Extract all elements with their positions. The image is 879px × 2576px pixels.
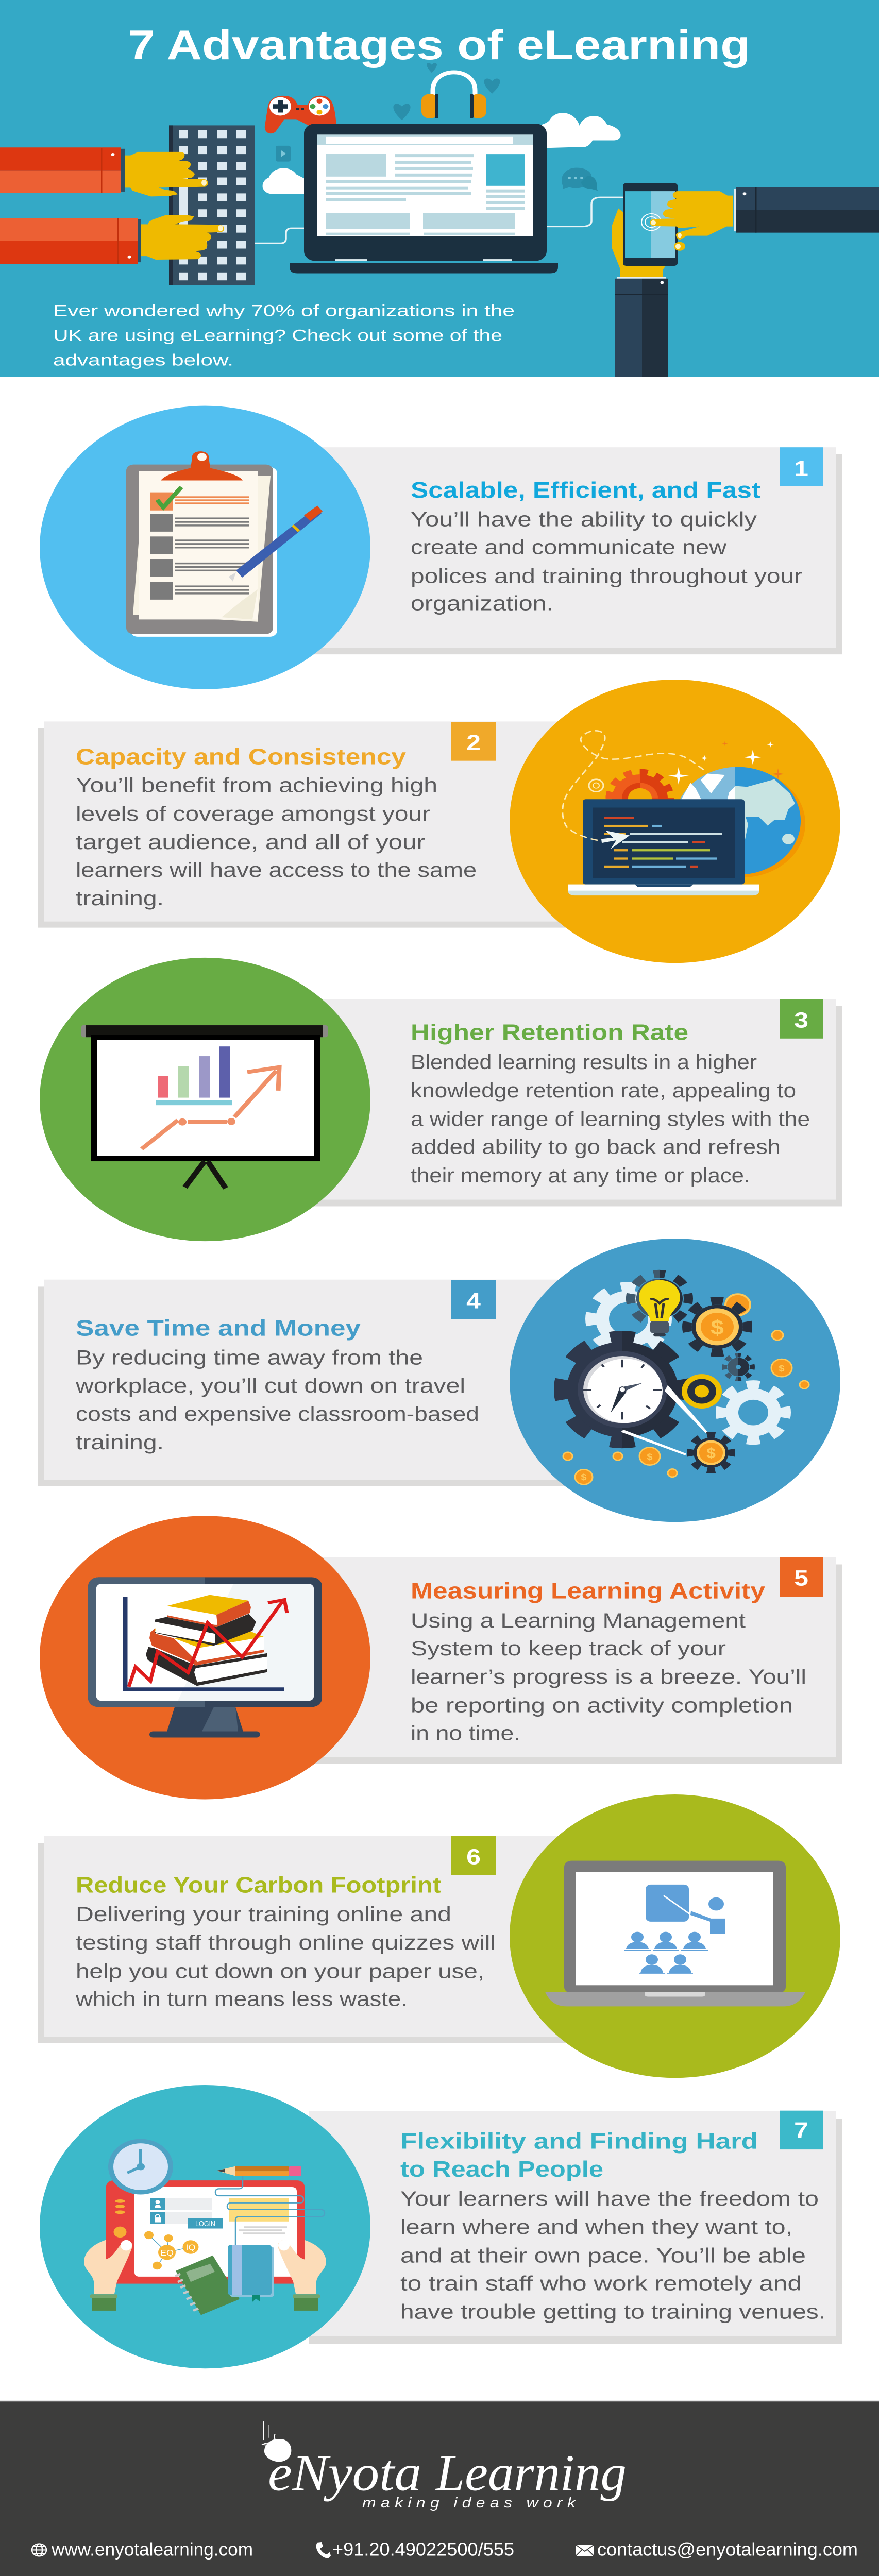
heading 1: Scalable, Efficient, and Fast xyxy=(411,478,760,503)
wire xyxy=(215,2176,325,2245)
intro text xyxy=(53,302,515,369)
body text 6: Delivering your training online and xyxy=(76,1903,451,1926)
coins: $ xyxy=(581,1472,587,1482)
logo apple icon xyxy=(263,2421,291,2462)
circle 2 xyxy=(510,680,840,963)
number badge 5 xyxy=(780,1557,823,1597)
coin gear xyxy=(687,1301,748,1353)
heading 5: Measuring Learning Activity xyxy=(411,1579,766,1604)
circle 5 xyxy=(40,1516,370,1799)
coins xyxy=(563,1330,809,1484)
icon: laptop xyxy=(290,124,558,274)
small dark gear xyxy=(724,1355,752,1379)
icon: monitor with books and chart xyxy=(88,1577,322,1737)
icon: keyboard xyxy=(169,125,255,285)
number badge 4: 4 xyxy=(466,1289,481,1313)
number badge 2: 2 xyxy=(466,730,481,755)
number badge 7: 7 xyxy=(794,2117,808,2142)
body text 5: be reporting on activity completion xyxy=(411,1694,793,1717)
circle 1 xyxy=(40,406,370,689)
icon: headphones xyxy=(421,72,486,118)
molecule xyxy=(144,2231,199,2269)
lightbulb gear xyxy=(631,1274,688,1324)
number badge 6 xyxy=(451,1836,496,1875)
contact: phone: +91.20.49022500/555 xyxy=(332,2539,514,2560)
icon: game controller xyxy=(265,96,336,133)
intro text: UK are using eLearning? Check out some of the xyxy=(53,327,502,345)
blue book xyxy=(228,2245,274,2302)
body text 4 xyxy=(75,1346,479,1454)
heading 7 xyxy=(400,2129,758,2182)
belt xyxy=(621,1385,708,1455)
icon: laptop with classroom xyxy=(545,1861,805,2006)
icon: left cloud xyxy=(263,168,309,194)
body text 6 xyxy=(75,1903,496,2011)
heading 7: to Reach People xyxy=(400,2157,603,2182)
body text 5: System to keep track of your xyxy=(411,1637,726,1660)
body text 7: to train staff who work remotely and xyxy=(400,2273,802,2295)
icon: globe and code laptop xyxy=(563,731,805,895)
circle 7 xyxy=(40,2085,370,2368)
circle 6 xyxy=(510,1794,840,2078)
icon: gears, clock, bulb and coins xyxy=(561,1274,809,1484)
intro text: Ever wondered why 70% of organizations in the xyxy=(53,302,515,320)
icon: presentation screen with chart xyxy=(81,1025,328,1188)
books xyxy=(146,1595,267,1686)
body text 3: a wider range of learning styles with the xyxy=(411,1108,810,1131)
body text 1 xyxy=(411,509,802,615)
body text 7: learn where and when they want to, xyxy=(400,2216,792,2239)
body text 2: training. xyxy=(76,887,164,910)
coin behind gear xyxy=(725,1294,750,1315)
body text 4: By reducing time away from the xyxy=(76,1346,423,1369)
icon: tablet with hands, clock, books xyxy=(84,2139,326,2315)
wires xyxy=(255,197,624,243)
number badge 1 xyxy=(780,447,823,486)
coin gear: $ xyxy=(711,1316,724,1339)
body text 4: costs and expensive classroom-based xyxy=(76,1403,479,1426)
number badge 3: 3 xyxy=(794,1008,808,1032)
login form xyxy=(150,2198,223,2229)
body text 1: create and communicate new xyxy=(411,536,727,559)
panel 6: Reduce Your Carbon Footprint xyxy=(38,1794,840,2078)
dollar gear xyxy=(690,1435,732,1470)
icon: chat bubbles xyxy=(562,168,598,191)
right hand xyxy=(278,2240,326,2311)
panel 4: Save Time and Money xyxy=(38,1239,840,1522)
body text 3: added ability to go back and refresh xyxy=(411,1136,781,1159)
coins: $ xyxy=(779,1363,785,1374)
lightbulb xyxy=(639,1280,680,1336)
icon: upper left sleeve and hand xyxy=(0,147,208,196)
body text 3 xyxy=(411,1051,810,1187)
left hand xyxy=(84,2240,132,2311)
logo tagline: making ideas work xyxy=(362,2495,577,2511)
body text 3: their memory at any time or place. xyxy=(411,1164,750,1187)
number badge 2 xyxy=(451,722,496,761)
footer xyxy=(0,2401,879,2576)
logo wordmark: Learning xyxy=(435,2444,627,2502)
number badge 7 xyxy=(780,2111,823,2149)
body text 7: Your learners will have the freedom to xyxy=(400,2188,819,2210)
body text 7 xyxy=(400,2188,825,2324)
body text 4: training. xyxy=(76,1431,164,1454)
body text 1: organization. xyxy=(411,592,553,615)
heading 2: Capacity and Consistency xyxy=(76,744,407,770)
white gear right xyxy=(721,1385,785,1440)
icon: hearts xyxy=(393,63,500,120)
header banner xyxy=(0,0,879,377)
number badge 5: 5 xyxy=(794,1566,808,1590)
panel 2: Capacity and Consistency xyxy=(38,680,840,963)
intro text: advantages below. xyxy=(53,351,233,369)
notebook xyxy=(175,2256,240,2315)
panel 7: Flexibility and Finding Hard to Reach People xyxy=(40,2085,842,2368)
body text 2: target audience, and all of your xyxy=(76,831,425,854)
body text 2: You’ll benefit from achieving high xyxy=(76,774,437,797)
icon: right sleeve and hand xyxy=(650,187,879,251)
icon: lower left sleeve and hand xyxy=(0,215,224,264)
title: 7 Advantages of eLearning xyxy=(128,22,750,68)
body text 3: Blended learning results in a higher xyxy=(411,1051,757,1074)
body text 7: and at their own pace. You’ll be able xyxy=(400,2245,806,2267)
body text 6: help you cut down on your paper use, xyxy=(76,1960,484,1983)
body text 4: workplace, you’ll cut down on travel xyxy=(75,1375,465,1397)
icon: right cloud xyxy=(533,113,621,148)
heading 6: Reduce Your Carbon Footprint xyxy=(76,1873,441,1897)
panel 1: Scalable, Efficient, and Fast xyxy=(40,406,842,689)
body text 1: You’ll have the ability to quickly xyxy=(411,509,757,531)
big clock gear xyxy=(561,1337,684,1442)
icon: play button xyxy=(276,146,291,162)
icon: phone held in hand xyxy=(612,183,678,279)
login form: LOGIN xyxy=(195,2220,215,2228)
molecule: IQ xyxy=(186,2243,195,2252)
heading 7: Flexibility and Finding Hard xyxy=(400,2129,758,2154)
number badge 3 xyxy=(780,999,823,1039)
body text 5 xyxy=(411,1609,806,1745)
body text 2: learners will have access to the same xyxy=(76,859,477,882)
logo wordmark xyxy=(268,2444,627,2511)
icon: clipboard xyxy=(126,451,323,637)
circle 3 xyxy=(40,958,370,1241)
body text 5: in no time. xyxy=(411,1722,520,1745)
icon: lower right sleeve xyxy=(615,279,668,377)
orange gear xyxy=(606,769,674,800)
heading 4: Save Time and Money xyxy=(76,1316,361,1341)
dollar gear: $ xyxy=(706,1446,716,1461)
panel 5: Measuring Learning Activity xyxy=(40,1516,842,1799)
body text 1: polices and training throughout your xyxy=(411,565,802,588)
body text 2 xyxy=(76,774,477,910)
number badge 4 xyxy=(451,1280,496,1319)
number badge 1: 1 xyxy=(794,456,808,481)
white gear left xyxy=(591,1287,666,1351)
contact: website: www.enyotalearning.com xyxy=(51,2539,253,2560)
pencil xyxy=(216,2166,301,2176)
body text 3: knowledge retention rate, appealing to xyxy=(411,1079,796,1102)
clock xyxy=(108,2139,173,2195)
body text 2: levels of coverage amongst your xyxy=(76,803,430,825)
body text 6: testing staff through online quizzes will xyxy=(76,1931,496,1954)
circle 4 xyxy=(510,1239,840,1522)
panel 3: Higher Retention Rate xyxy=(40,958,842,1241)
yellow gear circle xyxy=(682,1374,722,1409)
body text 5: learner’s progress is a breeze. You’ll xyxy=(411,1666,806,1688)
number badge 6: 6 xyxy=(466,1844,481,1869)
coins: $ xyxy=(647,1452,653,1462)
body text 6: which in turn means less waste. xyxy=(75,1988,408,2011)
heading 3: Higher Retention Rate xyxy=(411,1020,688,1045)
body text 7: have trouble getting to training venues. xyxy=(400,2300,825,2324)
molecule: EQ xyxy=(160,2248,174,2257)
body text 5: Using a Learning Management xyxy=(411,1609,746,1632)
logo wordmark: eNyota xyxy=(268,2444,421,2502)
